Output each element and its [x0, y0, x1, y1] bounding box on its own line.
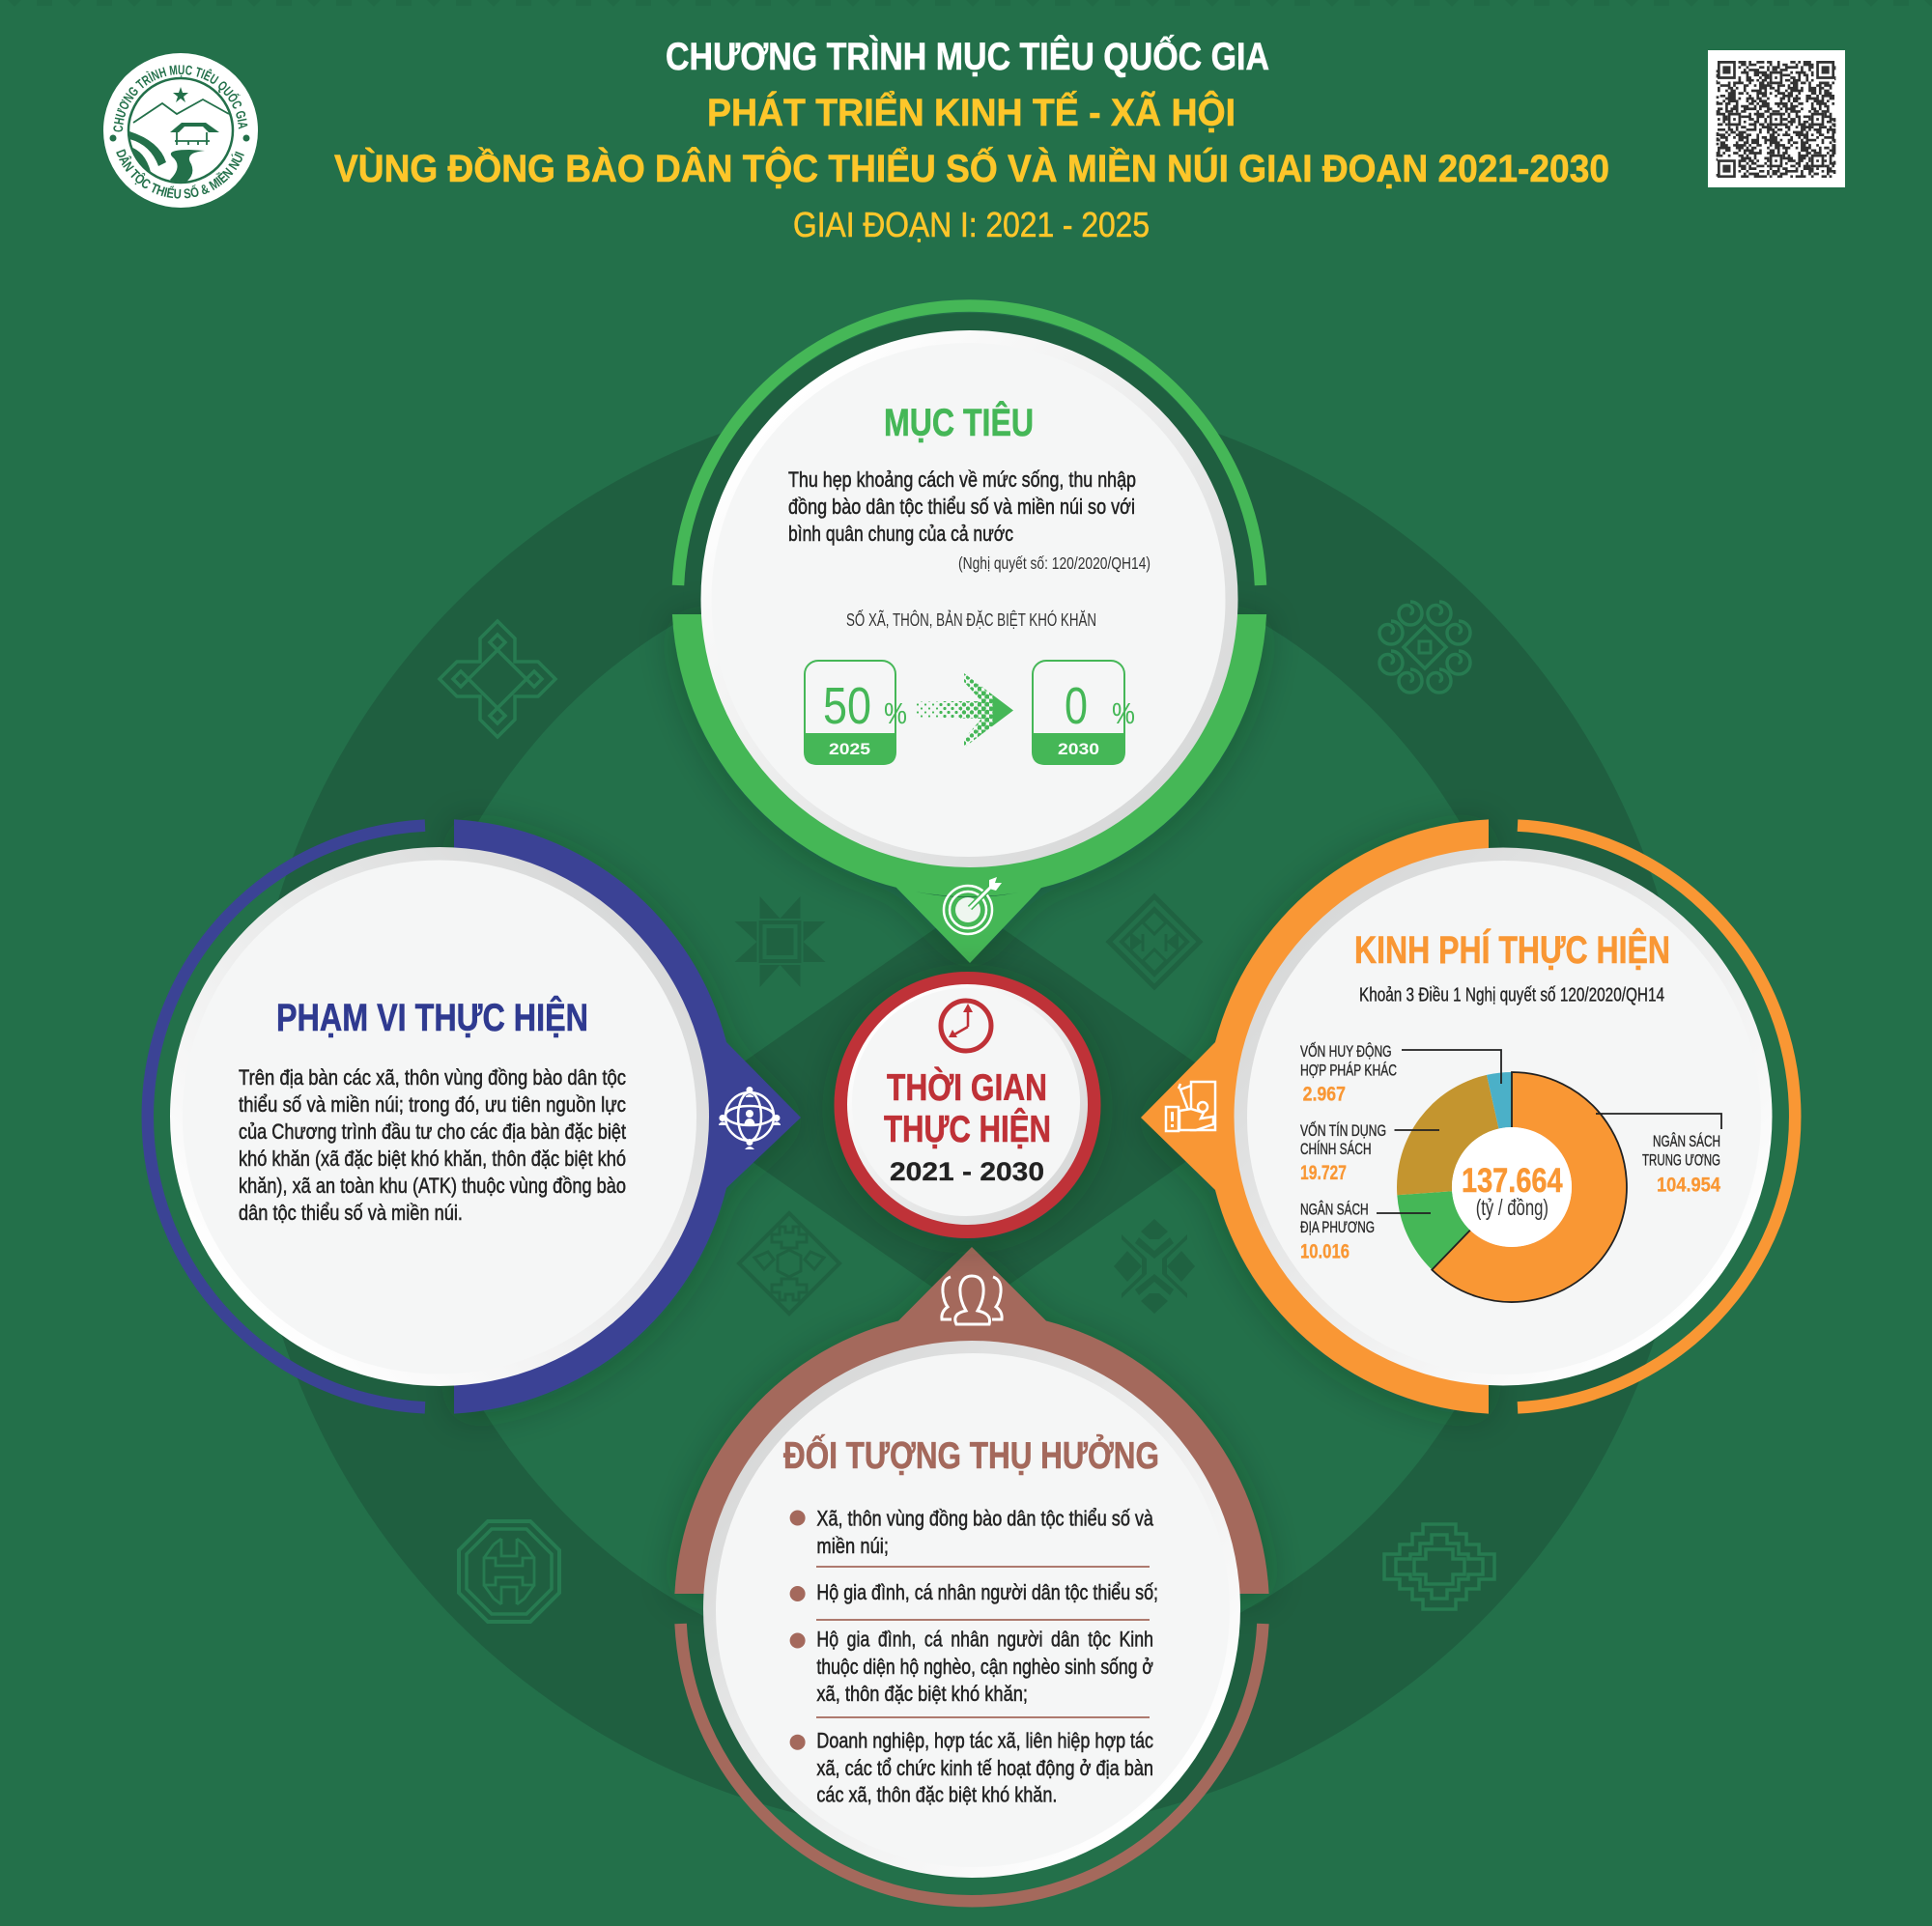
stat box 2025 [804, 661, 907, 765]
label: ngân sách địa phương: ĐỊA PHƯƠNG [1300, 1219, 1375, 1236]
bullet 3 [790, 1627, 1153, 1706]
motif: woven diamond [1109, 896, 1200, 987]
logo ring text top: CHƯƠNG TRÌNH MỤC TIÊU QUỐC GIA [113, 65, 247, 131]
label: vốn tín dụng: CHÍNH SÁCH [1300, 1140, 1372, 1158]
objective text: Thu hẹp khoảng cách về mức sống, thu nhập [788, 467, 1136, 492]
top pattern strip [0, 0, 1932, 7]
dark ring backdrop [246, 389, 1691, 1834]
blue frame with pointer [454, 819, 801, 1414]
heading: PHẠM VI THỰC HIỆN [276, 995, 588, 1039]
motif: spirals [1379, 602, 1470, 693]
logo ring text bottom: DÂN TỘC THIỂU SỐ & MIỀN NÚI [116, 149, 244, 199]
scope text: thiểu số và miền núi; trong đó, ưu tiên nguồn lực [239, 1092, 626, 1117]
heading: ĐỐI TƯỢNG THỤ HƯỞNG [783, 1433, 1159, 1477]
label: vốn huy động: 2.967 [1303, 1084, 1346, 1106]
bullet 1: miền núi; [816, 1534, 889, 1558]
heading: MỤC TIÊU [884, 400, 1034, 444]
icon: money in hand [1166, 1082, 1215, 1131]
label: vốn huy động [1300, 1041, 1397, 1106]
label: ngân sách trung ương: TRUNG ƯƠNG [1642, 1151, 1720, 1169]
motif: stepped cross [1384, 1524, 1494, 1609]
chart caption: SỐ XÃ, THÔN, BẢN ĐẶC BIỆT KHÓ KHĂN [846, 609, 1096, 630]
objective text [788, 467, 1136, 546]
icon: target [944, 877, 1002, 934]
icon: clock [941, 1001, 991, 1051]
label: ngân sách địa phương: NGÂN SÁCH [1300, 1200, 1369, 1219]
label: ngân sách địa phương: 10.016 [1300, 1241, 1350, 1263]
stat box 2030: 0 [1065, 677, 1088, 735]
title line 3: VÙNG ĐỒNG BÀO DÂN TỘC THIỂU SỐ VÀ MIỀN NÚI GIAI ĐOẠN 2021-2030 [334, 145, 1609, 190]
divider rules [816, 1567, 1150, 1717]
bullet 1: Xã, thôn vùng đồng bào dân tộc thiểu số và [816, 1507, 1153, 1531]
donut chart [1397, 1072, 1627, 1302]
stat box 2030: 2030 [1058, 740, 1099, 758]
panel: mục tiêu [672, 306, 1266, 963]
leader lines [1377, 1050, 1721, 1213]
stat box 2025: 50 [823, 677, 871, 735]
subtitle: GIAI ĐOẠN I: 2021 - 2025 [793, 205, 1150, 244]
bullet 1 [790, 1507, 1153, 1558]
title block [334, 34, 1609, 244]
bullet 4 [790, 1729, 1153, 1807]
QR code [1708, 50, 1845, 187]
panel: thời gian thực hiện [835, 972, 1101, 1238]
citation: (Nghị quyết số: 120/2020/QH14) [958, 553, 1151, 573]
label: vốn huy động: HỢP PHÁP KHÁC [1300, 1062, 1397, 1080]
panel: kinh phí thực hiện [1141, 819, 1795, 1414]
title line 1: CHƯƠNG TRÌNH MỤC TIÊU QUỐC GIA [666, 34, 1269, 78]
heading line 2: THỰC HIỆN [884, 1108, 1051, 1150]
label: vốn tín dụng [1300, 1120, 1386, 1184]
logo scene [126, 87, 229, 187]
total unit: (tỷ / đồng) [1476, 1195, 1548, 1220]
scope text: của Chương trình đầu tư cho các địa bàn đặc biệt [239, 1119, 627, 1144]
stat box 2030 [1032, 661, 1135, 765]
icon: globe [719, 1087, 781, 1149]
icon: people [942, 1276, 1002, 1324]
stat box 2025: % [884, 696, 907, 730]
motif: star square [734, 896, 825, 987]
halftone arrow [915, 673, 1013, 746]
bullet 2: Hộ gia đình, cá nhân người dân tộc thiểu số; [816, 1580, 1158, 1604]
heading: KINH PHÍ THỰC HIỆN [1354, 927, 1670, 972]
label: vốn tín dụng: VỐN TÍN DỤNG [1300, 1120, 1386, 1140]
label: ngân sách trung ương [1642, 1132, 1720, 1196]
bullet 4: xã, các tổ chức kinh tế hoạt động ở địa bàn [816, 1756, 1153, 1780]
label: ngân sách trung ương: NGÂN SÁCH [1653, 1132, 1720, 1150]
objective text: bình quân chung của cả nước [788, 522, 1013, 546]
scope text [239, 1065, 627, 1225]
label: vốn huy động: VỐN HUY ĐỘNG [1300, 1041, 1392, 1061]
label: ngân sách địa phương [1300, 1200, 1375, 1263]
bullet 4: các xã, thôn đặc biệt khó khăn. [816, 1783, 1057, 1807]
bullet 3: thuộc diện hộ nghèo, cận nghèo sinh sống ở [816, 1655, 1153, 1679]
green frame with pointer [672, 614, 1266, 963]
bullet 4: Doanh nghiệp, hợp tác xã, liên hiệp hợp tác [816, 1729, 1153, 1753]
motif: weave cross [1114, 1219, 1195, 1314]
label: vốn tín dụng: 19.727 [1300, 1162, 1347, 1184]
motif: ornate diamond [739, 1213, 839, 1314]
orange frame with pointer [1141, 819, 1489, 1414]
scope text: khó khăn (xã đặc biệt khó khăn, thôn đặc biệt khó [239, 1147, 626, 1171]
bullet 3: xã, thôn đặc biệt khó khăn; [816, 1682, 1028, 1706]
red ring [835, 972, 1101, 1238]
panel: phạm vi thực hiện [148, 819, 801, 1414]
logo [103, 53, 258, 208]
motif: octagon [459, 1521, 559, 1622]
panel: đối tượng thụ hưởng [674, 1247, 1269, 1901]
stat box 2030: % [1112, 696, 1135, 730]
scope text: Trên địa bàn các xã, thôn vùng đồng bào dân tộc [239, 1065, 626, 1090]
years: 2021 - 2030 [890, 1157, 1044, 1186]
heading line 1: THỜI GIAN [887, 1066, 1047, 1109]
scope text: dân tộc thiểu số và miền núi. [239, 1201, 463, 1225]
brown frame with pointer [674, 1247, 1269, 1594]
title line 2: PHÁT TRIỂN KINH TẾ - XÃ HỘI [707, 89, 1236, 134]
bullet 3: Hộ gia đình, cá nhân người dân tộc Kinh [816, 1627, 1153, 1651]
scope text: khăn), xã an toàn khu (ATK) thuộc vùng đồng bào [239, 1174, 626, 1198]
motif: diamond cross [440, 621, 555, 737]
objective text: đồng bào dân tộc thiểu số và miền núi so với [788, 495, 1135, 519]
subheading: Khoản 3 Điều 1 Nghị quyết số 120/2020/QH14 [1359, 985, 1664, 1006]
total value: 137.664 [1462, 1162, 1563, 1200]
stat box 2025: 2025 [829, 740, 870, 758]
label: ngân sách trung ương: 104.954 [1657, 1174, 1720, 1196]
